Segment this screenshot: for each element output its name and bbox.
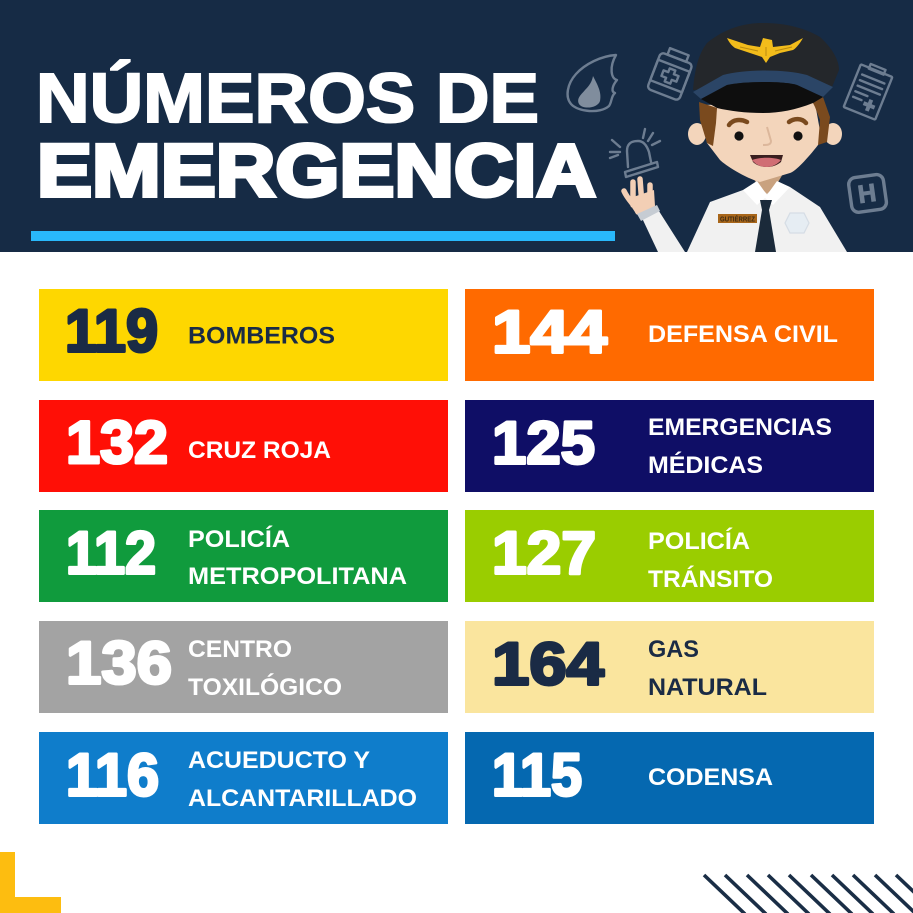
hair bbox=[699, 97, 830, 146]
panel: 115 codensa: CODENSA bbox=[648, 764, 773, 791]
corner accent: diagonal stripes bbox=[704, 875, 913, 913]
name tag bbox=[718, 214, 757, 224]
icon: alarm light bbox=[610, 129, 660, 177]
panel: 127 policia transito: TRÁNSITO bbox=[648, 565, 773, 593]
panel: 112 policia metropolitana bbox=[39, 510, 448, 602]
corner accent: yellow L bbox=[0, 852, 61, 913]
panel: 144 defensa civil: DEFENSA CIVIL bbox=[648, 321, 838, 348]
title underline bbox=[31, 231, 615, 241]
panel: 125 emergencias medicas: MÉDICAS bbox=[648, 451, 763, 479]
name tag: GUTIÉRREZ bbox=[720, 214, 756, 224]
panel: 164 gas natural bbox=[465, 621, 874, 713]
title: EMERGENCIA bbox=[37, 129, 596, 212]
panel: 125 emergencias medicas: EMERGENCIAS bbox=[648, 414, 832, 441]
cap bbox=[693, 23, 839, 113]
title: NÚMEROS DE bbox=[36, 59, 539, 137]
panel: 164 gas natural: NATURAL bbox=[648, 674, 767, 701]
cap emblem: golden eagle bbox=[727, 38, 803, 63]
nose bbox=[763, 127, 771, 145]
badge hexagon bbox=[785, 213, 809, 233]
tie bbox=[755, 200, 776, 252]
panel: 119 bomberos bbox=[39, 289, 448, 381]
panel: 116 acueducto y alcantarillado: 116 bbox=[66, 742, 159, 808]
mouth bbox=[750, 155, 783, 167]
panel: 116 acueducto y alcantarillado: ALCANTARILLADO bbox=[188, 785, 417, 812]
collar bbox=[743, 181, 790, 205]
panel: 164 gas natural: GAS bbox=[648, 636, 699, 663]
header banner bbox=[0, 0, 913, 252]
panel: 144 defensa civil: 144 bbox=[492, 298, 608, 366]
panel: 125 emergencias medicas bbox=[465, 400, 874, 492]
panel: 119 bomberos: 119 bbox=[65, 298, 158, 364]
torso bbox=[687, 187, 847, 252]
panel: 144 defensa civil bbox=[465, 289, 874, 381]
neck bbox=[752, 172, 784, 194]
icon: flame bbox=[568, 55, 617, 111]
panel: 127 policia transito bbox=[465, 510, 874, 602]
panel: 125 emergencias medicas: 125 bbox=[492, 410, 595, 476]
panel: 136 centro toxilogico: 136 bbox=[66, 630, 172, 696]
panel: 127 policia transito: POLICÍA bbox=[648, 527, 750, 555]
panel: 132 cruz roja bbox=[39, 400, 448, 492]
icon: hospital sign: H bbox=[856, 179, 878, 209]
icon: clipboard bbox=[844, 61, 894, 120]
panel: 112 policia metropolitana: POLICÍA bbox=[188, 525, 290, 553]
panel: 112 policia metropolitana: 112 bbox=[66, 520, 156, 586]
character: police officer bbox=[624, 23, 847, 252]
eyes and brows bbox=[729, 119, 806, 141]
panel: 116 acueducto y alcantarillado bbox=[39, 732, 448, 824]
panel: 164 gas natural: 164 bbox=[492, 630, 605, 698]
panel: 119 bomberos: BOMBEROS bbox=[188, 322, 335, 350]
panel: 136 centro toxilogico: CENTRO bbox=[188, 636, 292, 663]
panel: 127 policia transito: 127 bbox=[492, 520, 596, 586]
panel: 116 acueducto y alcantarillado: ACUEDUCTO Y bbox=[188, 747, 370, 774]
panel: 136 centro toxilogico: TOXILÓGICO bbox=[188, 673, 342, 701]
panel: 132 cruz roja: CRUZ ROJA bbox=[188, 437, 331, 464]
panel: 132 cruz roja: 132 bbox=[66, 409, 168, 476]
panel: 112 policia metropolitana: METROPOLITANA bbox=[188, 563, 407, 590]
face bbox=[700, 103, 822, 182]
title bbox=[36, 59, 596, 212]
icon: medicine bottle bbox=[647, 46, 695, 101]
left arm and hand bbox=[624, 179, 685, 252]
ears bbox=[688, 123, 842, 145]
panel: 136 centro toxilogico bbox=[39, 621, 448, 713]
icon: hospital sign bbox=[848, 174, 887, 213]
panel: 115 codensa: 115 bbox=[492, 742, 582, 808]
panel: 115 codensa bbox=[465, 732, 874, 824]
